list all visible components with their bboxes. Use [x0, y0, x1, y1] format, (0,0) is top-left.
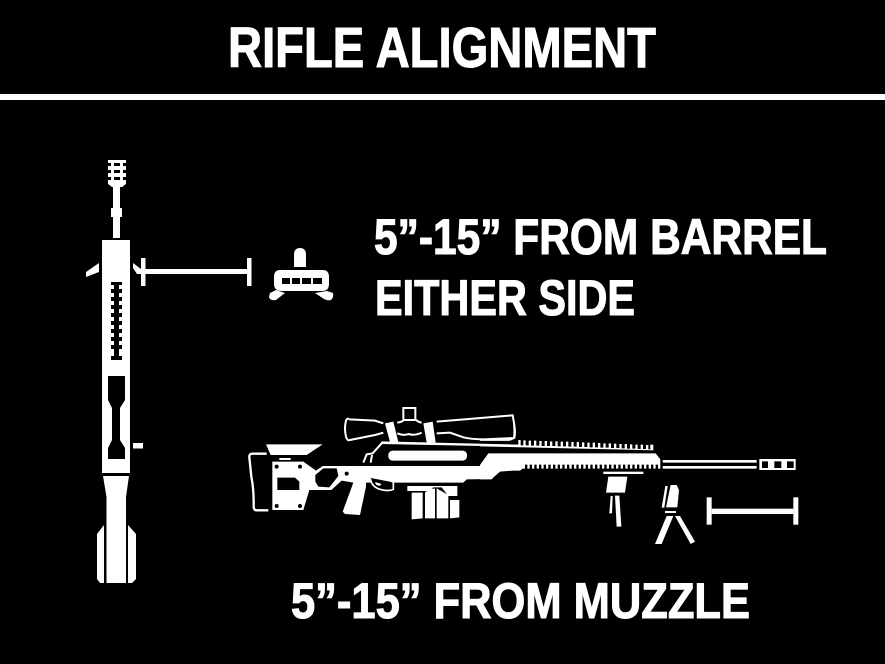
trigger	[375, 482, 382, 486]
bipod body	[274, 270, 329, 291]
bipod left foot	[269, 290, 285, 300]
stock	[103, 476, 129, 583]
objective bell tail	[480, 420, 515, 440]
cheek riser bar	[279, 458, 291, 460]
top rail	[480, 440, 653, 450]
muzzle brake	[108, 160, 126, 187]
barrel lines	[663, 460, 757, 463]
bolt handle	[363, 443, 382, 463]
either side label: EITHER SIDE	[375, 270, 635, 326]
header rule	[0, 94, 885, 100]
side distance marker	[141, 258, 252, 286]
scope rings	[385, 422, 436, 443]
muzzle brake	[759, 459, 796, 470]
detached bipod	[666, 485, 679, 507]
muzzle distance marker	[707, 497, 712, 525]
upper receiver band	[380, 441, 520, 447]
receiver with cutouts	[102, 240, 130, 473]
stock right cheek	[128, 525, 136, 583]
muzzle distance label: 5”-15” FROM MUZZLE	[291, 573, 750, 629]
bipod front view	[269, 248, 333, 300]
rifle side view: forend, barrel and bipod	[480, 420, 798, 544]
chassis body with stock plate	[272, 454, 540, 515]
butt pad	[249, 454, 268, 510]
trigger guard	[371, 478, 392, 490]
side tab	[133, 443, 143, 448]
bipod top	[294, 248, 306, 267]
stock left cheek	[97, 525, 104, 583]
right wing	[133, 263, 141, 274]
left wing	[86, 263, 99, 277]
rifle top view	[86, 160, 143, 583]
barrel	[111, 186, 122, 238]
bipod right foot	[315, 291, 333, 300]
attached bipod	[603, 472, 643, 474]
magazine	[407, 486, 457, 496]
scope outline	[345, 408, 514, 440]
title: RIFLE ALIGNMENT	[228, 16, 656, 80]
rifle side view: scope	[345, 408, 520, 463]
stock hole cutouts	[275, 465, 349, 508]
forend with teeth	[480, 453, 660, 479]
cheek rest	[266, 444, 323, 455]
chassis pill	[388, 451, 467, 461]
rifle side view: stock and chassis	[249, 444, 540, 519]
